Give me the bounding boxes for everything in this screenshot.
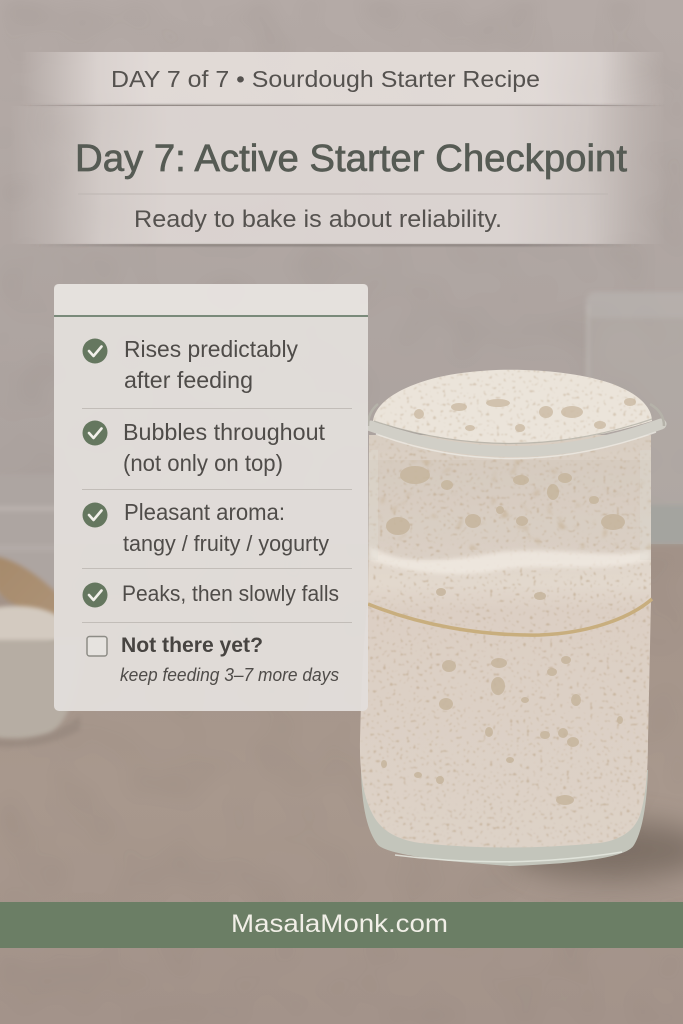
header band: series label xyxy=(20,52,665,106)
website: MasalaMonk.com xyxy=(231,910,448,938)
item: rises predictably xyxy=(82,336,298,393)
background bowl with flour and wooden spoon xyxy=(0,504,78,746)
subtitle: Ready to bake is about reliability. xyxy=(134,206,502,233)
rubber band xyxy=(368,599,652,635)
item: not there yet: Not there yet? xyxy=(121,633,263,657)
item: peaks then falls: Peaks, then slowly falls xyxy=(122,581,339,606)
item: pleasant aroma xyxy=(82,499,329,556)
sourdough starter jar xyxy=(350,362,664,866)
header panel xyxy=(10,52,665,246)
jar glass base xyxy=(361,770,648,866)
item: pleasant aroma: tangy / fruity / yogurty xyxy=(123,531,329,556)
header band: title and subtitle xyxy=(10,106,665,246)
item: not there yet: keep feeding 3–7 more days xyxy=(120,665,339,685)
jar body with starter xyxy=(350,430,660,860)
series label text: DAY 7 of 7 • Sourdough Starter Recipe xyxy=(111,66,540,92)
item: rises predictably: after feeding xyxy=(124,367,253,393)
domed foam top xyxy=(373,370,652,443)
item: bubbles throughout: (not only on top) xyxy=(123,450,283,476)
jar shadow on table xyxy=(510,820,683,880)
title: Day 7: Active Starter Checkpoint xyxy=(75,138,627,180)
jar rim xyxy=(368,404,664,459)
item: bubbles throughout: Bubbles throughout xyxy=(123,419,326,445)
item: bubbles throughout xyxy=(82,419,326,476)
item: not there yet xyxy=(87,633,339,685)
footer banner xyxy=(0,902,683,948)
checklist panel xyxy=(54,284,368,711)
item: rises predictably: Rises predictably xyxy=(124,336,298,362)
background glass jar xyxy=(586,292,683,544)
item: pleasant aroma: Pleasant aroma: xyxy=(124,499,285,525)
